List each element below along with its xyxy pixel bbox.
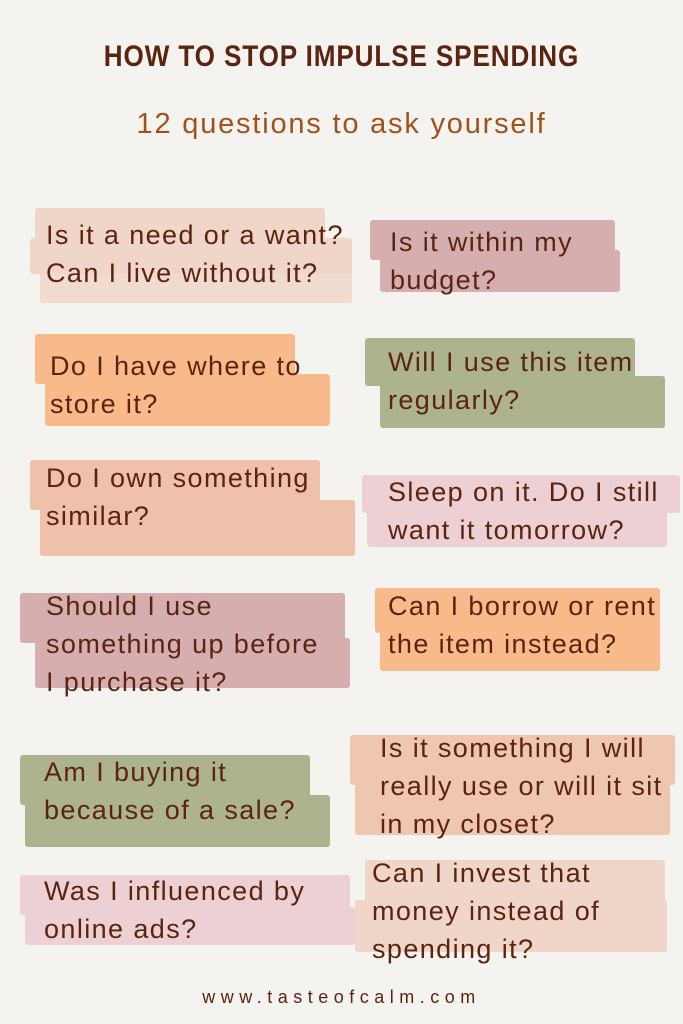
card 7: I purchase it? [46,667,228,697]
card 3: store it? [50,389,159,419]
card 1: Can I live without it? [46,258,318,288]
card 10: Is it something I will [380,733,645,763]
card 4 [365,338,665,428]
subtitle: 12 questions to ask yourself [137,108,546,140]
card 4: Will I use this item [388,347,634,377]
card 6: want it tomorrow? [388,515,625,545]
card 7: something up before [46,629,319,659]
card 6: Sleep on it. Do I still [388,477,659,507]
card 9: Am I buying it [44,757,227,787]
card 4: regularly? [388,385,521,415]
card 12: spending it? [372,934,534,964]
card 5: Do I own something [46,463,310,493]
footer url: www.tasteofcalm.com [202,987,481,1007]
card 12 [355,858,667,964]
card 3: Do I have where to [50,351,302,381]
card 2 [370,220,620,295]
card 11: Was I influenced by [44,876,305,906]
card 12: money instead of [372,896,600,926]
card 1: Is it a need or a want? [46,220,344,250]
card 9 [20,755,330,847]
card 8: Can I borrow or rent [388,591,656,621]
card 11 [20,875,355,945]
card 9: because of a sale? [44,795,296,825]
card 7 [20,591,350,697]
card 11: online ads? [44,914,198,944]
card 8: the item instead? [388,629,617,659]
card 2: budget? [390,265,497,295]
card 1 [30,208,352,303]
card 5 [30,460,355,556]
title: HOW TO STOP IMPULSE SPENDING [104,40,579,73]
card 7: Should I use [46,591,213,621]
card 12: Can I invest that [372,858,591,888]
card 8 [375,588,660,671]
card 10 [350,733,675,839]
card 6 [362,475,680,547]
card 3 [35,334,330,426]
card 10: really use or will it sit [380,771,663,801]
card 10: in my closet? [380,809,556,839]
card 2: Is it within my [390,227,573,257]
card 5: similar? [46,501,150,531]
